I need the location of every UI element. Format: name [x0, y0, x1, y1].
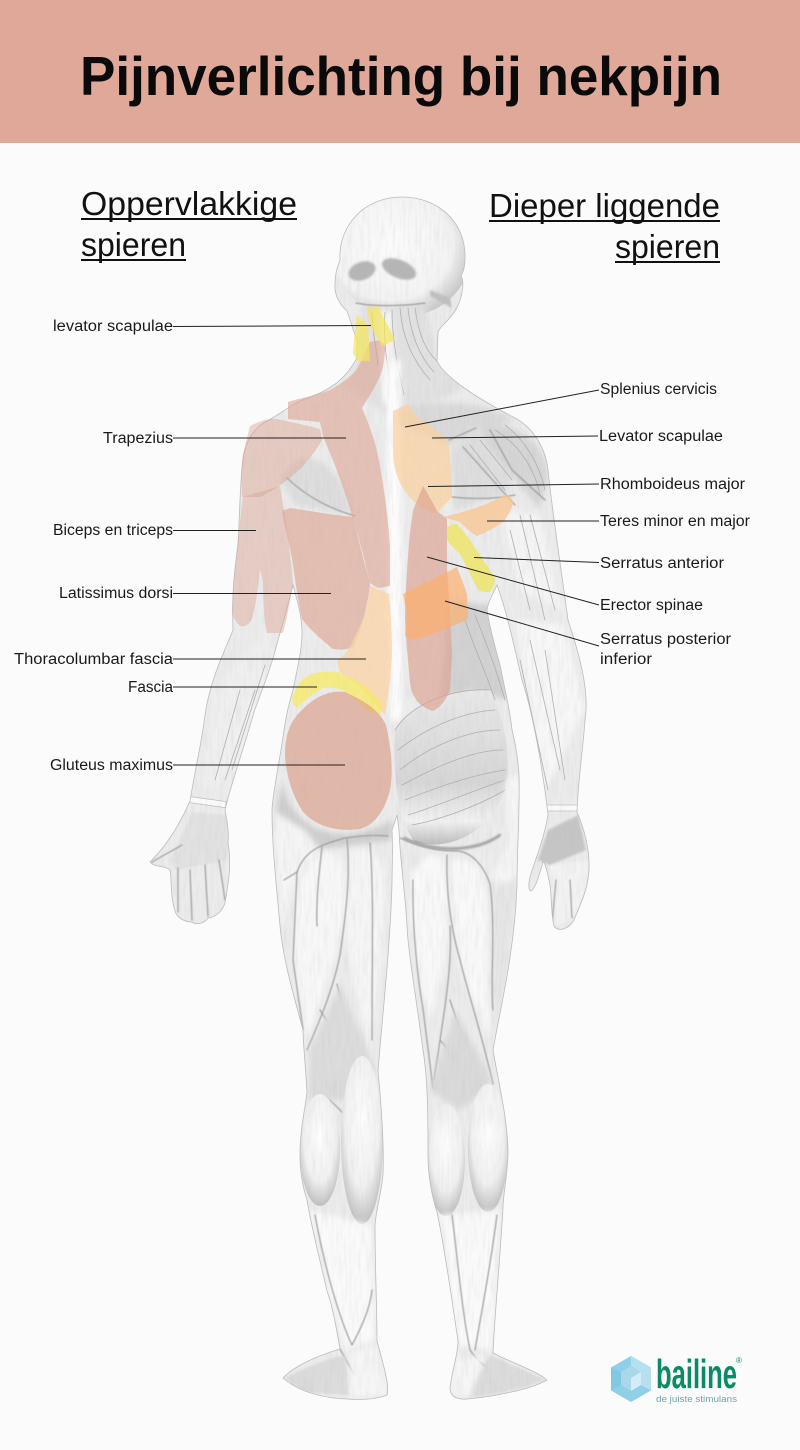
- callout: Latissimus dorsi: Latissimus dorsi: [59, 585, 173, 602]
- callout: levator scapulae (left): levator scapulae: [53, 318, 173, 335]
- anatomical figure: human body rear view: [140, 190, 600, 1410]
- callout: Rhomboideus major: Rhomboideus major: [600, 476, 745, 493]
- callout: Splenius cervicis: [405, 381, 717, 427]
- body outline: [150, 197, 589, 1400]
- callout: Teres minor en major: Teres minor en major: [600, 513, 750, 530]
- muscle: deltoid: [241, 419, 322, 497]
- logo: bailine: de juiste stimulans: [656, 1394, 738, 1404]
- knee and calf muscles: [300, 988, 508, 1372]
- left heading: Oppervlakkige spieren: [81, 185, 297, 263]
- callout: Gluteus maximus: Gluteus maximus: [50, 757, 173, 774]
- right heading: Dieper liggende spieren: spieren: [615, 228, 720, 265]
- logo: bailine: bailine: [656, 1351, 737, 1397]
- left heading: Oppervlakkige spieren: Oppervlakkige: [81, 185, 297, 222]
- callout: Splenius cervicis: Splenius cervicis: [600, 381, 717, 398]
- logo: bailine: ®: [736, 1356, 742, 1365]
- muscle: fascia: [292, 671, 382, 715]
- muscle: teres minor and major: [443, 495, 513, 536]
- back muscle shading: [205, 403, 585, 790]
- callout: Levator scapulae (right): Levator scapulae: [599, 428, 723, 445]
- left heading: Oppervlakkige spieren: spieren: [81, 226, 186, 263]
- callout: Erector spinae: [427, 557, 703, 614]
- muscle: trapezius: [288, 340, 390, 588]
- thigh muscles: [284, 835, 517, 1115]
- muscle highlight overlays: [232, 306, 513, 830]
- callout: Fascia: Fascia: [128, 679, 173, 696]
- fibre texture: [162, 204, 576, 1386]
- header banner: [0, 0, 800, 143]
- muscle: semispinalis yellow: [367, 306, 395, 346]
- spine highlight: [386, 360, 402, 720]
- muscle: thoracolumbar fascia: [337, 586, 392, 715]
- logo: bailine: [611, 1351, 742, 1404]
- muscle: biceps and triceps: [232, 486, 293, 633]
- right heading: Dieper liggende spieren: Dieper liggende: [489, 187, 720, 224]
- muscle: serratus anterior: [447, 524, 495, 592]
- muscle: latissimus dorsi: [282, 508, 370, 650]
- left gluteus base and hip: [272, 780, 392, 850]
- callout: Serratus posterior inferior: inferior: [600, 651, 652, 668]
- hands: [152, 797, 588, 925]
- callout: Trapezius: Trapezius: [103, 430, 173, 447]
- head and neck shading: [340, 198, 464, 408]
- callout: Serratus anterior: [474, 555, 724, 572]
- right heading: Dieper liggende spieren: [489, 187, 720, 265]
- callout: Serratus posterior inferior: [445, 601, 731, 668]
- muscle: gluteus maximus: [285, 692, 392, 830]
- callout: Erector spinae: Erector spinae: [600, 597, 703, 614]
- icon: blue hexagon gem: [611, 1356, 651, 1402]
- callout: Biceps en triceps: Biceps en triceps: [53, 522, 173, 539]
- title: Pijnverlichting bij nekpijn: [80, 45, 722, 107]
- callout: Thoracolumbar fascia: Thoracolumbar fascia: [14, 651, 174, 668]
- muscle: serratus posterior inferior: [403, 567, 468, 640]
- muscle: splenius and levator scapulae: [393, 404, 452, 513]
- muscle: erector spinae: [405, 486, 452, 711]
- right gluteus: [394, 690, 508, 845]
- callout: Serratus anterior: Serratus anterior: [600, 555, 724, 572]
- feet shading: [285, 1355, 350, 1395]
- muscle: levator scapulae left: [353, 315, 370, 361]
- callout: Serratus posterior inferior: Serratus posterior: [600, 631, 731, 648]
